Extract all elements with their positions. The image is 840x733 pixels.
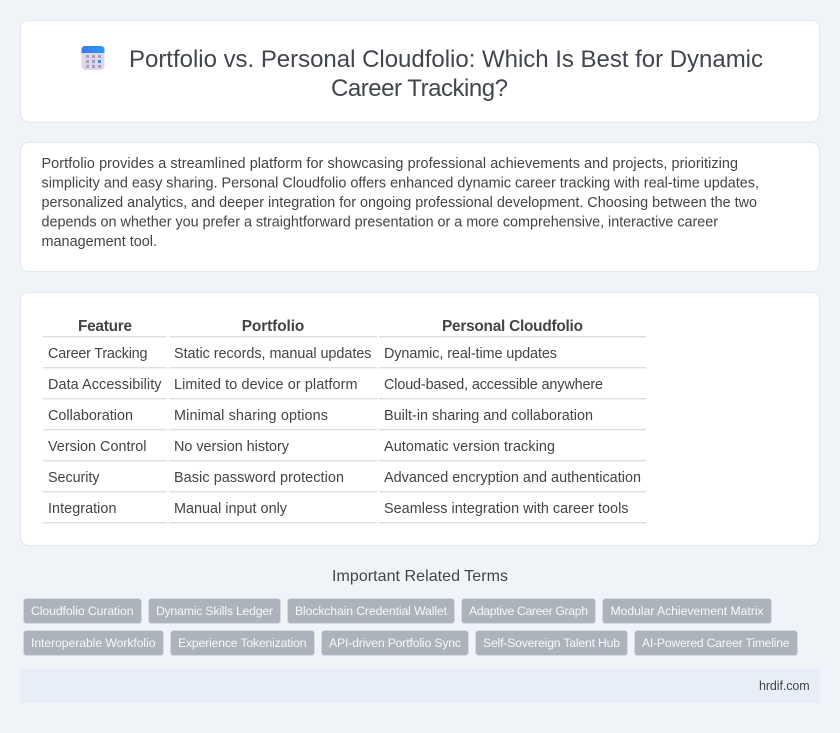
text block: summary paragraph: management tool. [42,234,157,250]
tag [634,630,798,656]
row: career tracking: Dynamic, real-time updates [384,346,557,362]
tag [288,598,454,624]
tag [148,598,280,624]
tag list: related terms [24,598,798,656]
table header row: Portfolio [242,318,304,335]
row: data accessibility [48,377,603,393]
tag: Cloudfolio Curation [31,604,134,618]
tag: Interoperable Workfolio [31,636,156,650]
row: career tracking [48,346,557,362]
row: security: Security [48,470,100,486]
row: integration: Integration [48,501,116,517]
row: integration [48,501,628,517]
table header row [78,318,583,335]
tag [24,630,164,656]
title: Career Tracking? [331,75,508,102]
row: integration: Seamless integration with career tools [384,501,628,517]
text block: summary paragraph: simplicity and easy sharing. Personal Cloudfolio offers enhanced dynamic career tracking with real-time updates, [42,176,759,192]
title [129,46,763,102]
row: data accessibility: Data Accessibility [48,377,162,393]
row: integration: Manual input only [174,501,288,517]
tag [322,630,468,656]
row: version control [48,439,555,455]
tag: Adaptive Career Graph [469,604,588,618]
tag: Modular Achievement Matrix [610,604,764,618]
panel: comparison table [20,292,820,546]
row: data accessibility: Cloud-based, accessible anywhere [384,377,603,393]
row: version control: No version history [174,439,290,455]
tag: API-driven Portfolio Sync [329,636,461,650]
row: career tracking: Static records, manual updates [174,346,372,362]
row: career tracking: Career Tracking [48,346,148,362]
tag: Experience Tokenization [178,636,306,650]
footer bar [20,669,820,703]
row: security: Basic password protection [174,470,344,486]
panel: title header [20,20,820,122]
tag: AI-Powered Career Timeline [642,636,790,650]
row: security: Advanced encryption and authentication [384,470,641,486]
footer source text: hrdif.com [759,679,810,693]
icon: calendar [82,46,104,70]
tag [24,598,142,624]
tag: Self-Sovereign Talent Hub [483,636,620,650]
panel: summary [20,142,820,272]
table header row: Feature [78,318,132,335]
tag [170,630,314,656]
row: data accessibility: Limited to device or platform [174,377,358,393]
table header row: Personal Cloudfolio [442,318,583,335]
tag [602,598,772,624]
tag [462,598,596,624]
text block: summary paragraph: personalized analytics, and deeper integration for ongoing professional development. Choosing between the two [42,195,757,211]
row: collaboration [48,408,593,424]
tag: Blockchain Credential Wallet [295,604,448,618]
row: security [48,470,641,486]
row: version control: Version Control [48,439,146,455]
row: collaboration: Minimal sharing options [174,408,328,424]
row: collaboration: Collaboration [48,408,133,424]
row: collaboration: Built-in sharing and collaboration [384,408,593,424]
title: Portfolio vs. Personal Cloudfolio: Which Is Best for Dynamic [129,46,763,73]
text block: summary paragraph: Portfolio provides a streamlined platform for showcasing professional achievements and projects, prioritizing [42,156,738,172]
text block: summary paragraph: depends on whether you prefer a straightforward presentation or a more comprehensive, interactive career [42,214,718,230]
text block: summary paragraph [42,156,759,250]
tag [476,630,628,656]
row: version control: Automatic version tracking [384,439,555,455]
heading: important related terms: Important Related Terms [332,568,508,585]
tag: Dynamic Skills Ledger [156,604,273,618]
